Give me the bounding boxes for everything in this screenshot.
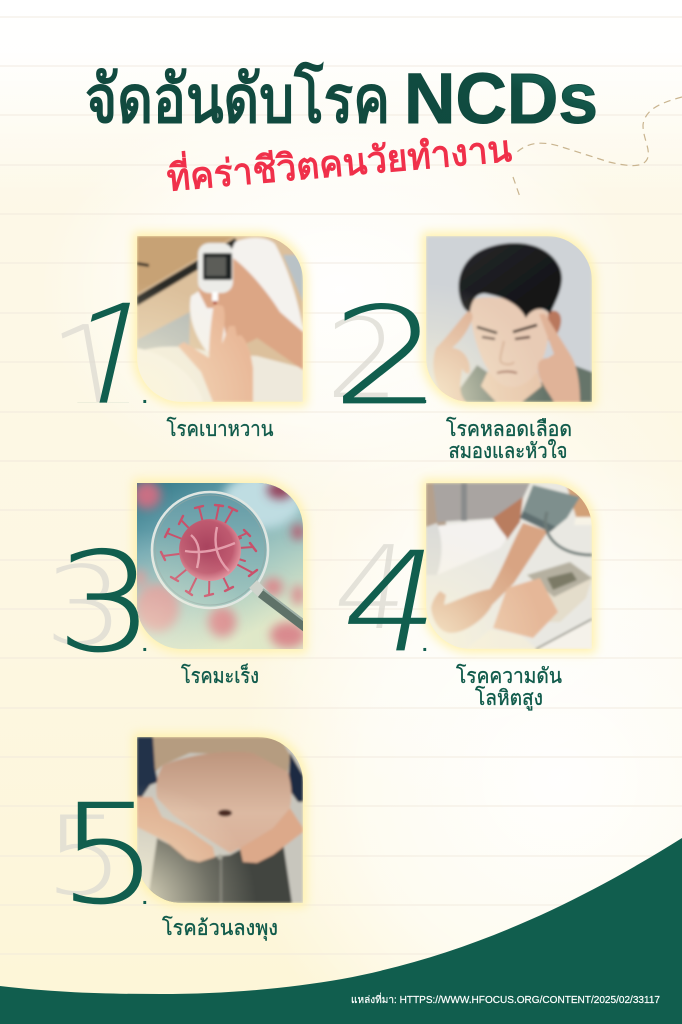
panel: rank 4: 4 bbox=[326, 523, 418, 656]
number 1 bbox=[77, 302, 146, 403]
subtitle: ที่คร่าชีวิตคนวัยทำงาน bbox=[165, 122, 513, 199]
photo: man with headache bbox=[426, 236, 592, 402]
number 1: 1 bbox=[48, 274, 174, 443]
number 3: . bbox=[142, 634, 148, 656]
label: โลหิตสูง bbox=[475, 686, 543, 711]
dashed route decoration bbox=[513, 97, 682, 197]
label: โรคเบาหวาน bbox=[166, 417, 274, 441]
panel: rank 2 bbox=[326, 236, 592, 463]
footer band bbox=[0, 838, 682, 1024]
panel: rank 3 bbox=[44, 473, 307, 688]
label: โรคมะเร็ง bbox=[181, 662, 259, 688]
number 5: 5 bbox=[58, 775, 159, 934]
label: โรคความดัน bbox=[456, 664, 562, 688]
panel: rank 1 bbox=[43, 236, 303, 443]
photo: blood glucose meter bbox=[137, 236, 303, 402]
label: โรคหลอดเลือด bbox=[446, 417, 572, 441]
title: จัดอันดับโรค bbox=[85, 60, 390, 136]
label bbox=[446, 417, 572, 463]
photo: abdominal obesity bbox=[137, 737, 303, 903]
title: NCDs bbox=[404, 60, 598, 139]
number 4: 4 bbox=[330, 524, 456, 683]
label bbox=[456, 664, 562, 711]
number 3: 3 bbox=[56, 523, 154, 683]
panel: rank 3: 3 bbox=[44, 542, 124, 670]
photo: blood pressure measurement bbox=[426, 483, 592, 649]
panel: rank 2: 2 bbox=[326, 297, 399, 423]
title bbox=[85, 60, 598, 139]
number 5: . bbox=[142, 887, 148, 909]
number 4: . bbox=[422, 634, 428, 656]
panel: rank 5: 5 bbox=[44, 792, 124, 920]
photo: virus under magnifier bbox=[137, 483, 303, 649]
panel: rank 4 bbox=[326, 483, 592, 711]
label: โรคอ้วนลงพุง bbox=[162, 916, 278, 941]
panel: rank 5 bbox=[44, 737, 303, 941]
panel: rank 1: 1 bbox=[43, 302, 140, 436]
number 2: 2 bbox=[332, 279, 442, 435]
source: แหล่งที่มา: HTTPS://WWW.HFOCUS.ORG/CONTENT/2025/02/33117 bbox=[351, 992, 660, 1006]
number 2: . bbox=[422, 386, 428, 408]
label: สมองและหัวใจ bbox=[448, 439, 568, 463]
number 1: . bbox=[142, 386, 148, 408]
